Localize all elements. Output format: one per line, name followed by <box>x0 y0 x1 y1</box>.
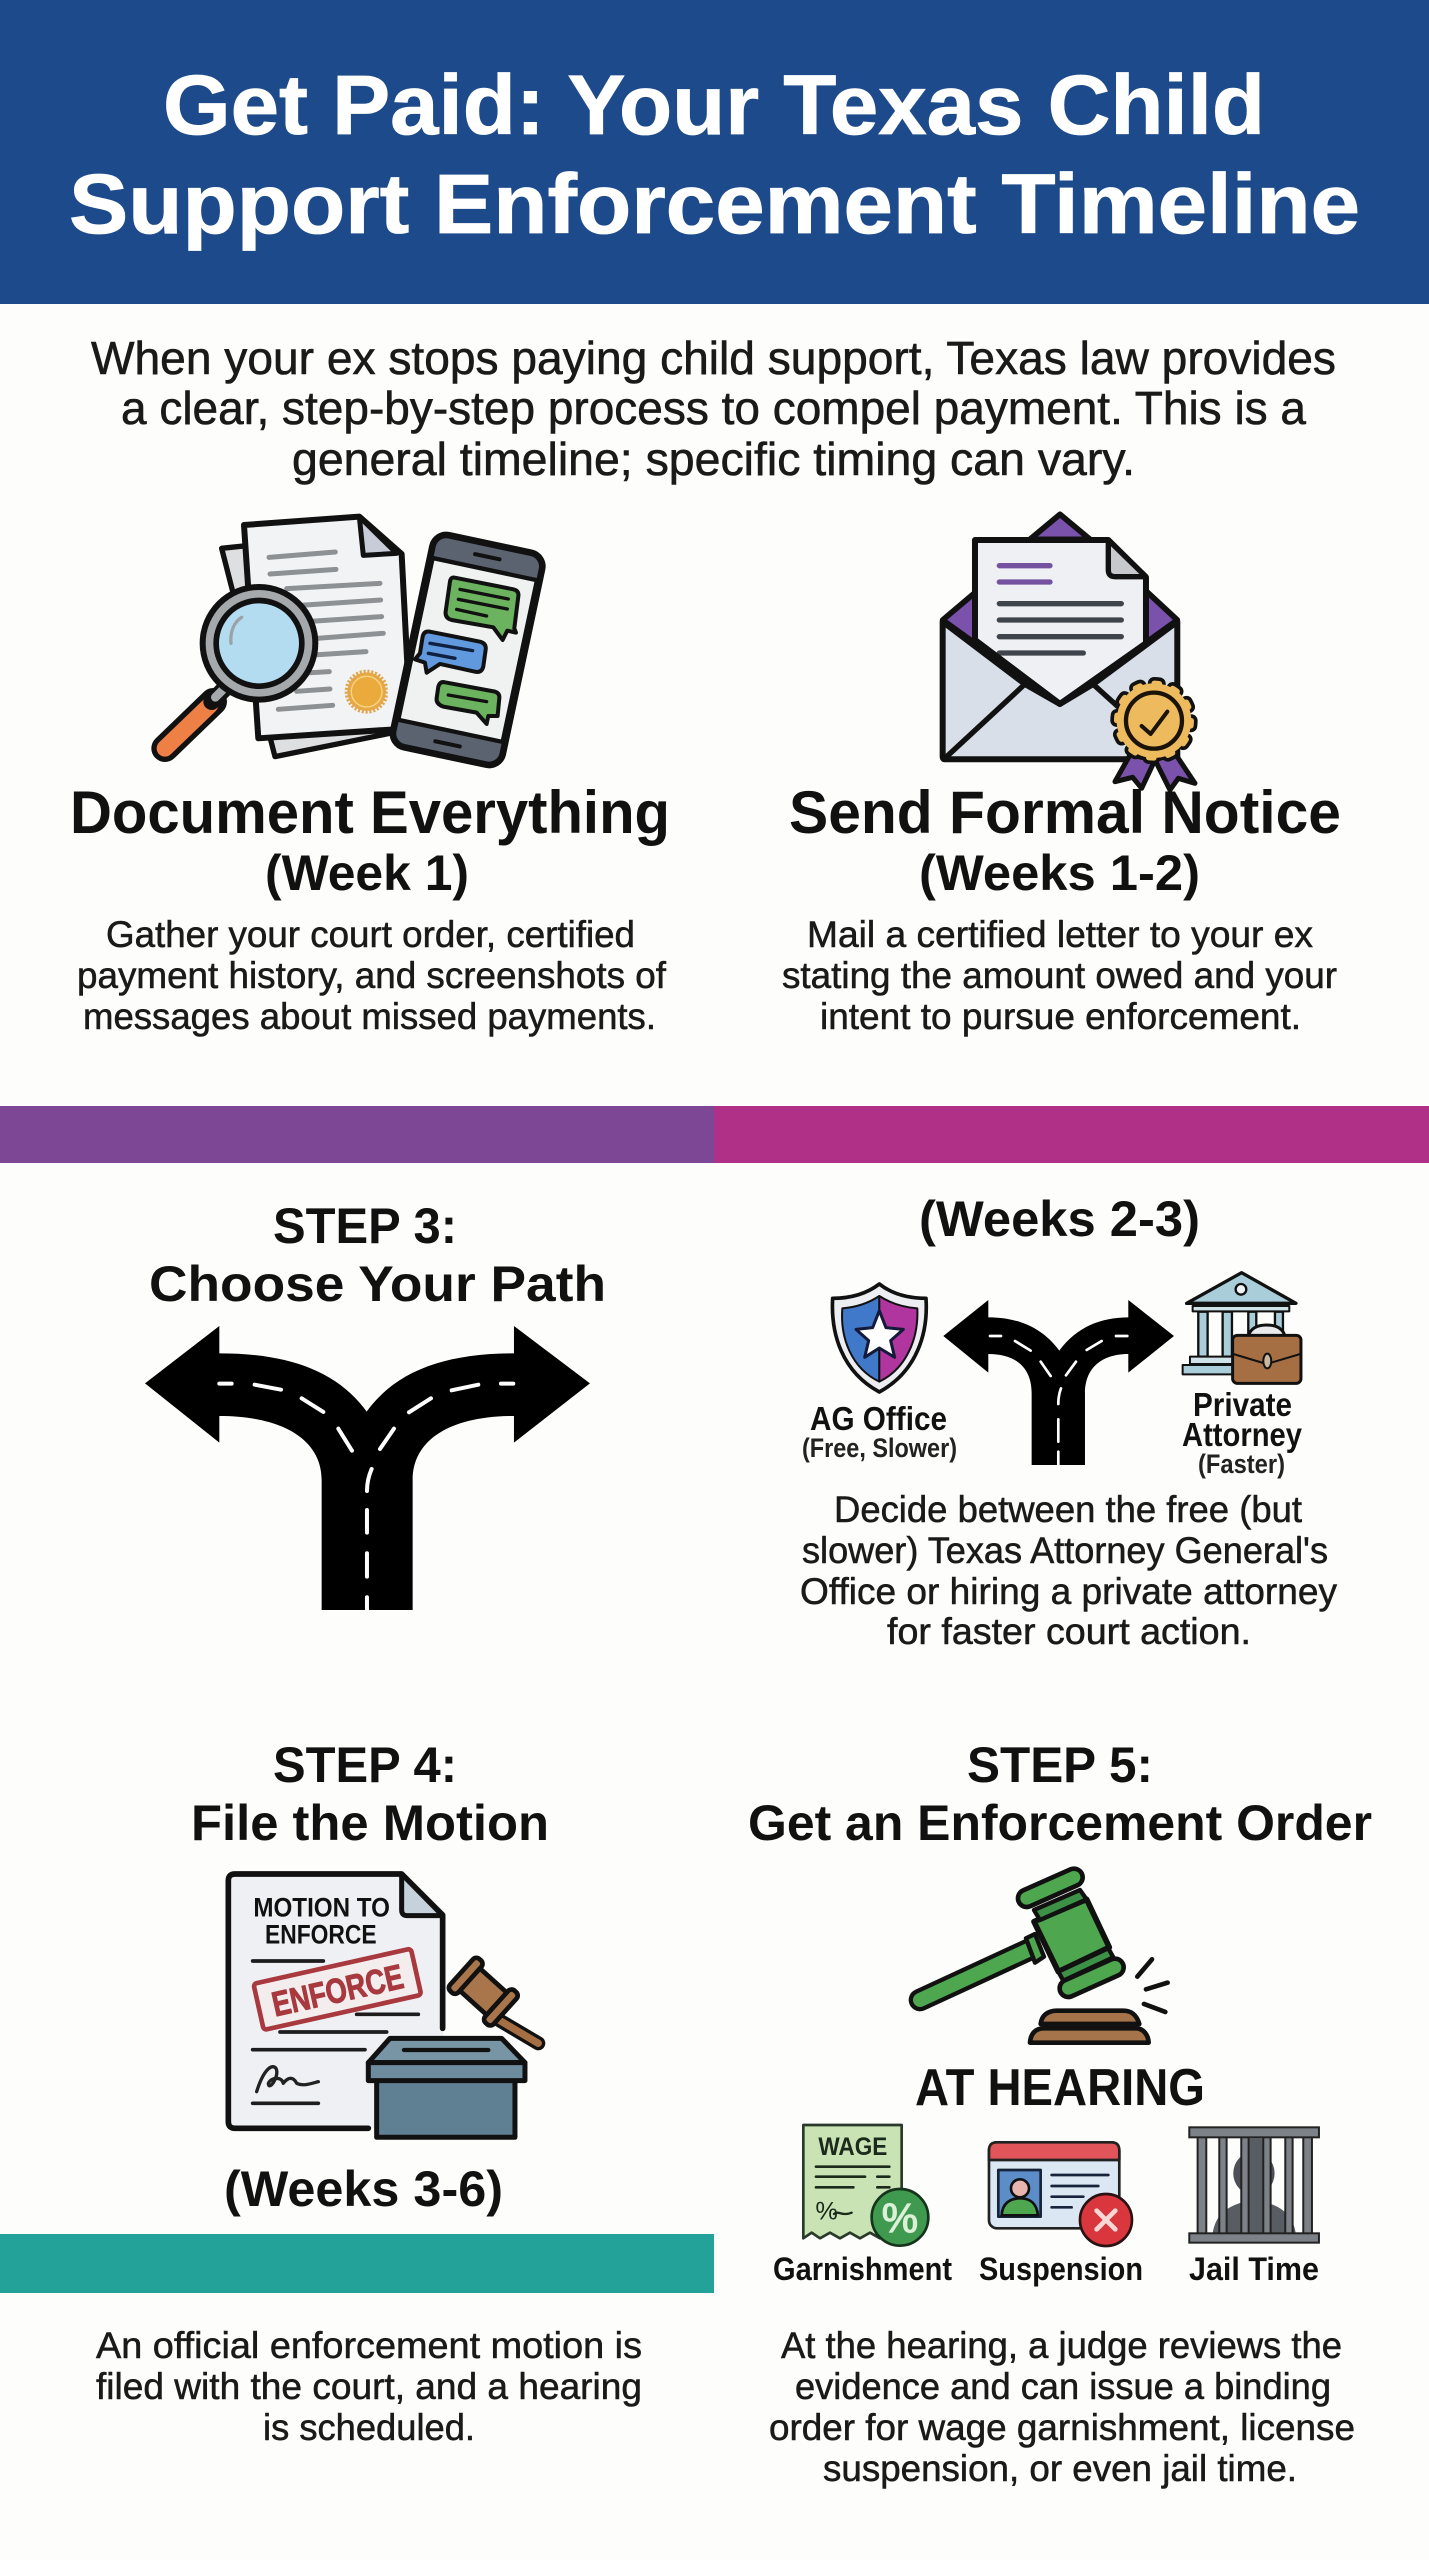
intro text <box>91 332 1336 485</box>
label: garnishment: Garnishment <box>773 2251 952 2287</box>
icon: AG office shield <box>832 1284 926 1392</box>
heading: step 4 <box>191 1737 549 1851</box>
description: evidence and can issue a binding <box>795 2366 1331 2407</box>
description: messages about missed payments. <box>83 996 656 1037</box>
label: suspension: Suspension <box>979 2251 1143 2287</box>
intro text: a clear, step-by-step process to compel payment. This is a <box>121 382 1306 434</box>
icon: green gavel on block <box>920 1877 1168 2043</box>
label: private attorney: Private <box>1193 1386 1292 1423</box>
divider band: purple and magenta <box>0 1106 1429 1163</box>
icon: documents, magnifier and phone <box>165 517 545 768</box>
icon: motion document, gavel and filing box <box>228 1873 538 2137</box>
heading: step 3: STEP 3: <box>273 1198 457 1254</box>
label: AG office <box>802 1400 957 1463</box>
panel: step 4 <box>0 1737 714 2448</box>
panel: document everything <box>70 517 670 1037</box>
icon: wage garnishment: WAGE <box>818 2133 887 2161</box>
label: private attorney: (Faster) <box>1198 1449 1285 1479</box>
title <box>69 58 1360 251</box>
description <box>77 914 667 1037</box>
heading: step 5 <box>748 1737 1372 1851</box>
label: AG office: AG Office <box>810 1400 947 1437</box>
heading: step 3: Choose Your Path <box>149 1256 606 1312</box>
icon: wage garnishment: % <box>882 2195 918 2243</box>
icon: jail bars <box>1189 2127 1319 2243</box>
divider band: teal <box>0 2234 714 2293</box>
description: At the hearing, a judge reviews the <box>781 2325 1342 2366</box>
heading: step 4: File the Motion <box>191 1795 549 1851</box>
panel: step 3 heading and road <box>145 1198 606 1610</box>
timing: week 1: (Week 1) <box>265 845 469 901</box>
title: Support Enforcement Timeline <box>69 157 1360 251</box>
header banner <box>0 0 1429 304</box>
icon: license suspension <box>989 2142 1132 2246</box>
label: private attorney <box>1182 1386 1303 1479</box>
heading: step 3 <box>149 1198 606 1312</box>
description: Decide between the free (but <box>834 1489 1303 1530</box>
icon: motion document, gavel and filing box: MOTION TO <box>253 1893 390 1923</box>
description <box>769 2325 1355 2489</box>
heading: step 4: STEP 4: <box>273 1737 457 1793</box>
intro text: When your ex stops paying child support, Texas law provides <box>91 332 1336 384</box>
heading: step 5: Get an Enforcement Order <box>748 1795 1372 1851</box>
description: intent to pursue enforcement. <box>820 996 1301 1037</box>
description: order for wage garnishment, license <box>769 2407 1355 2448</box>
description: Mail a certified letter to your ex <box>807 914 1313 955</box>
panel: step 5 <box>748 1737 1372 2489</box>
icon: motion document, gavel and filing box: ENFORCE <box>269 1958 407 2024</box>
description <box>782 914 1337 1037</box>
timing: weeks 1-2: (Weeks 1-2) <box>919 845 1200 901</box>
heading: send formal notice: Send Formal Notice <box>789 779 1341 846</box>
description: filed with the court, and a hearing <box>96 2366 642 2407</box>
icon: motion document, gavel and filing box: ENFORCE <box>265 1919 377 1949</box>
icon: wage garnishment <box>803 2125 928 2246</box>
icon: forked road arrow <box>145 1326 590 1610</box>
description: payment history, and screenshots of <box>77 955 667 996</box>
icon: courthouse and briefcase <box>1183 1273 1301 1383</box>
panel: step 3 detail <box>800 1191 1337 1652</box>
label: jail time: Jail Time <box>1189 2251 1319 2287</box>
intro text: general timeline; specific timing can vary. <box>292 433 1135 485</box>
label: private attorney: Attorney <box>1182 1416 1303 1453</box>
panel: send formal notice <box>782 514 1341 1037</box>
description: An official enforcement motion is <box>96 2325 642 2366</box>
icon: small forked road <box>943 1300 1174 1465</box>
description: Office or hiring a private attorney <box>800 1571 1337 1612</box>
description <box>96 2325 642 2448</box>
icon: wage garnishment: % <box>815 2197 838 2225</box>
description: for faster court action. <box>887 1611 1251 1652</box>
description <box>800 1489 1337 1652</box>
description: Gather your court order, certified <box>106 914 635 955</box>
description: slower) Texas Attorney General's <box>802 1530 1328 1571</box>
icon: envelope with certified seal <box>943 514 1195 790</box>
label: AG office: (Free, Slower) <box>802 1433 957 1463</box>
timing: weeks 2-3: (Weeks 2-3) <box>919 1191 1200 1247</box>
title: Get Paid: Your Texas Child <box>163 58 1265 152</box>
heading: document everything: Document Everything <box>70 779 670 846</box>
heading: at hearing: AT HEARING <box>915 2059 1205 2117</box>
description: suspension, or even jail time. <box>823 2448 1297 2489</box>
description: is scheduled. <box>263 2407 475 2448</box>
description: stating the amount owed and your <box>782 955 1337 996</box>
timing: weeks 3-6: (Weeks 3-6) <box>224 2161 503 2217</box>
heading: step 5: STEP 5: <box>967 1737 1153 1793</box>
